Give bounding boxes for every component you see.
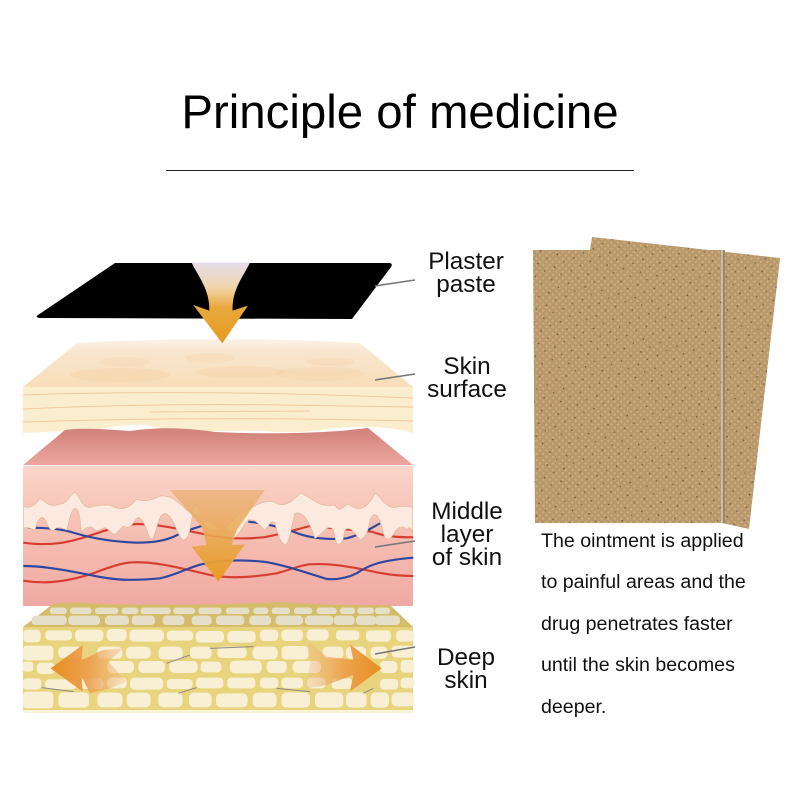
description text: The ointment is applied bbox=[541, 530, 744, 552]
product: front patch bbox=[533, 250, 725, 523]
label: deep skin: skin bbox=[444, 667, 488, 694]
skin surface layer bbox=[23, 339, 413, 433]
arrow: spreading right bbox=[307, 642, 382, 692]
label: plaster paste: Plaster bbox=[428, 248, 504, 275]
label: middle layer of skin: layer bbox=[441, 521, 493, 548]
label: deep skin bbox=[437, 644, 495, 694]
plaster paste layer bbox=[37, 263, 392, 319]
description text: to painful areas and the bbox=[541, 571, 746, 593]
product: back patch bbox=[590, 237, 780, 529]
description text: drug penetrates faster bbox=[541, 612, 733, 634]
label: skin surface: Skin bbox=[443, 353, 491, 380]
divider rule bbox=[166, 170, 634, 171]
description text: deeper. bbox=[541, 696, 606, 718]
label: middle layer of skin: Middle bbox=[431, 498, 503, 525]
arrow: spreading left bbox=[51, 645, 127, 693]
label: plaster paste bbox=[428, 248, 504, 298]
arrow: plaster to skin bbox=[192, 263, 250, 343]
description text: until the skin becomes bbox=[541, 654, 735, 676]
arrow: into middle layer bbox=[170, 490, 265, 582]
label: skin surface bbox=[427, 353, 507, 403]
leader lines bbox=[375, 280, 415, 654]
middle layer of skin bbox=[23, 428, 413, 606]
title: Principle of medicine bbox=[181, 86, 619, 139]
description text bbox=[541, 530, 746, 718]
dermal ridges band bbox=[23, 492, 413, 545]
label: middle layer of skin bbox=[431, 498, 503, 571]
label: deep skin: Deep bbox=[437, 644, 495, 671]
label: middle layer of skin: of skin bbox=[432, 544, 502, 571]
label: plaster paste: paste bbox=[436, 271, 496, 298]
deep skin layer bbox=[23, 602, 414, 713]
label: skin surface: surface bbox=[427, 376, 507, 403]
